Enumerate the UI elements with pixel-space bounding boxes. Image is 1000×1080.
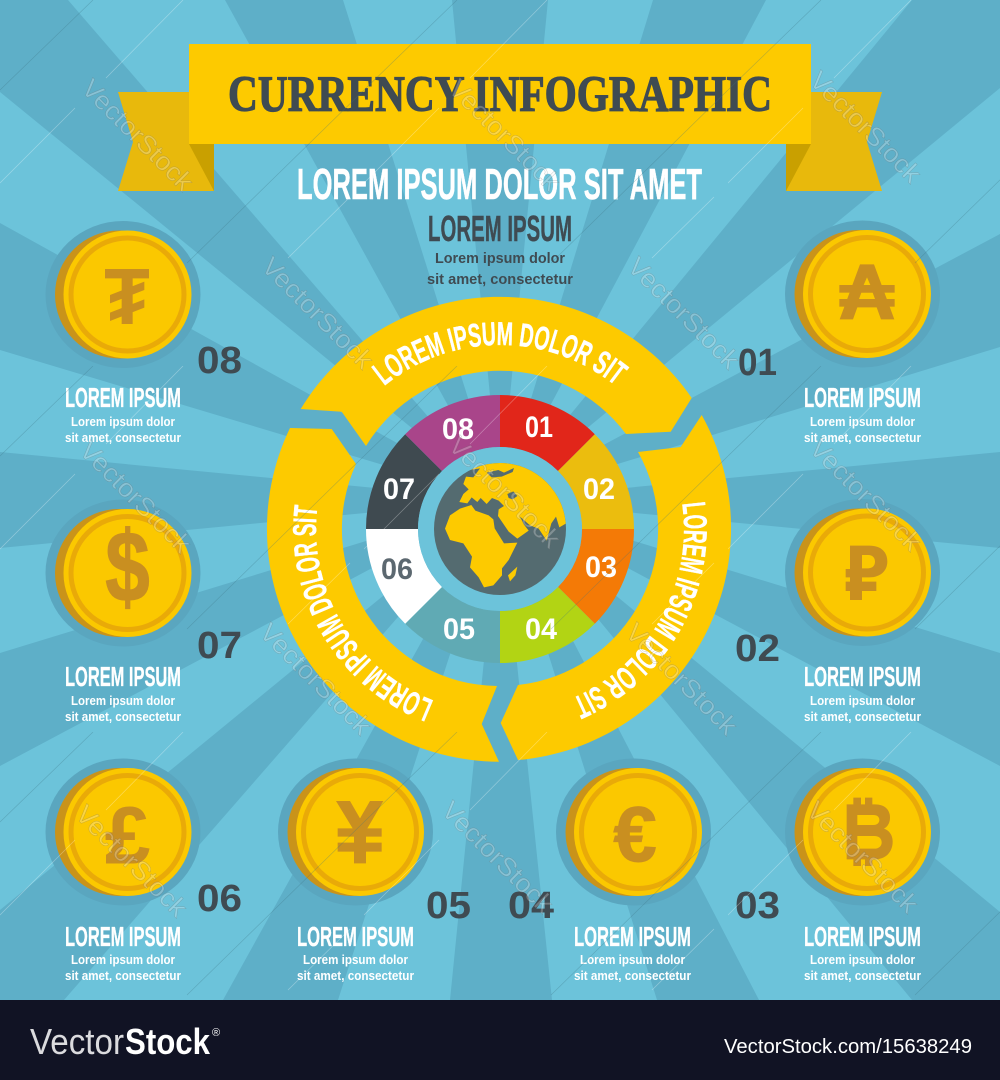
footer id: VectorStock.com/15638249 (724, 1036, 972, 1058)
text block 01: sit amet, consectetur (804, 430, 921, 445)
text block 06 (65, 921, 181, 983)
text block 05: LOREM IPSUM (297, 921, 414, 952)
item 08: tugrik coin (46, 221, 200, 368)
text block 03 (804, 921, 921, 983)
Eurasia landmass (459, 463, 566, 540)
text block 08: LOREM IPSUM (65, 382, 181, 413)
text block 07: sit amet, consectetur (65, 709, 181, 724)
item 07: dollar coin (46, 500, 200, 646)
text block 05: Lorem ipsum dolor (303, 952, 408, 967)
arrow label: right: LOREM IPSUM DOLOR SIT (576, 502, 708, 720)
text block 01: LOREM IPSUM (804, 382, 921, 413)
arrow segment: right (501, 415, 731, 760)
watermark overlay: VectorStock (443, 73, 567, 198)
item 06: pound coin (46, 758, 200, 906)
segment 06 (366, 529, 442, 624)
text block 04 (574, 921, 691, 983)
watermark overlay: VectorStock (622, 251, 746, 376)
segment 07 (366, 434, 442, 529)
text block 03: sit amet, consectetur (804, 968, 921, 983)
icon: dollar symbol: $ (105, 512, 150, 623)
footer bar (0, 1000, 1000, 1080)
segment 08 (405, 395, 500, 471)
arrow segment: top (301, 297, 692, 446)
text block 08: Lorem ipsum dolor (71, 414, 175, 429)
ribbon left fold (189, 144, 214, 191)
icon: tugrik symbol (105, 269, 149, 324)
watermark overlay: VectorStock (76, 73, 200, 198)
segment 01 (500, 395, 595, 471)
title ribbon (118, 44, 882, 191)
text block 01 (804, 382, 921, 445)
watermark overlay: VectorStock (801, 795, 925, 920)
segment numbers: 08 (442, 413, 474, 446)
number 08: 08 (197, 340, 242, 382)
central text block: Lorem ipsum dolor (435, 250, 565, 267)
footer logo (30, 1021, 220, 1062)
icon: yen symbol (336, 801, 383, 863)
ribbon band (189, 44, 811, 144)
segment 05 (405, 587, 500, 663)
arrow label: left: LOREM IPSUM DOLOR SIT (292, 504, 434, 722)
watermark overlay: VectorStock (443, 430, 567, 555)
text block 05 (297, 921, 414, 983)
segment numbers: 01 (525, 411, 553, 444)
ribbon right fold (786, 144, 811, 191)
watermark overlay: VectorStock (70, 799, 194, 924)
watermark overlay: VectorStock (254, 617, 378, 742)
text block 04: LOREM IPSUM (574, 921, 691, 952)
Black Sea and northern seas (487, 468, 517, 499)
segment numbers: 02 (583, 473, 615, 506)
text block 04: sit amet, consectetur (574, 968, 691, 983)
item 02: ruble coin (785, 499, 940, 646)
watermark overlay: VectorStock (620, 617, 744, 742)
text block 04: Lorem ipsum dolor (580, 952, 685, 967)
ribbon left tail (118, 92, 214, 191)
number 05: 05 (426, 885, 471, 927)
title: CURRENCY INFOGRAPHIC (228, 67, 772, 123)
watermark overlay: VectorStock (436, 795, 560, 920)
segment numbers: 04 (525, 613, 557, 646)
segment numbers: 05 (443, 613, 475, 646)
arrow segment: left (267, 428, 499, 762)
icon: ruble symbol (846, 546, 887, 600)
icon: bitcoin symbol (847, 798, 893, 866)
number 01: 01 (738, 342, 777, 384)
central text block: sit amet, consectetur (427, 271, 573, 288)
text block 06: LOREM IPSUM (65, 921, 181, 952)
item 03: bitcoin coin (785, 758, 940, 906)
icon: austral symbol (839, 264, 895, 319)
item 04: euro coin (556, 758, 711, 906)
text block 02: sit amet, consectetur (804, 709, 921, 724)
text block 07 (65, 661, 181, 724)
text block 06: sit amet, consectetur (65, 968, 181, 983)
text block 08 (65, 382, 181, 445)
text block 01: Lorem ipsum dolor (810, 414, 915, 429)
Madagascar (508, 567, 517, 581)
circular arrows ring (266, 296, 732, 762)
segment numbers (381, 411, 617, 646)
segment numbers: 06 (381, 553, 413, 586)
ribbon right tail (786, 92, 882, 191)
segment numbers: 03 (585, 551, 617, 584)
icon: pound symbol: £ (105, 791, 150, 880)
text block 02: Lorem ipsum dolor (810, 693, 915, 708)
item 05: yen coin (278, 758, 433, 906)
number 03: 03 (735, 885, 780, 927)
text block 02: LOREM IPSUM (804, 661, 921, 692)
text block 07: Lorem ipsum dolor (71, 693, 175, 708)
subtitle: LOREM IPSUM DOLOR SIT AMET (297, 160, 702, 209)
footer logo: ® (212, 1027, 220, 1039)
text block 06: Lorem ipsum dolor (71, 952, 175, 967)
text block 07: LOREM IPSUM (65, 661, 181, 692)
segment 03 (558, 529, 634, 624)
number 07: 07 (197, 625, 242, 667)
watermark overlay: VectorStock (256, 251, 380, 376)
text block 03: LOREM IPSUM (804, 921, 921, 952)
watermark overlay: VectorStock (74, 435, 198, 560)
central text block (427, 208, 573, 288)
text block 02 (804, 661, 921, 724)
item 01: austral coin (785, 220, 940, 368)
Africa landmass (445, 505, 517, 587)
watermark overlay: VectorStock (804, 433, 928, 558)
segment 02 (558, 434, 634, 529)
text block 05: sit amet, consectetur (297, 968, 414, 983)
footer logo: Vector (30, 1021, 124, 1062)
number 04: 04 (508, 885, 554, 927)
text block 03: Lorem ipsum dolor (810, 952, 915, 967)
number 02: 02 (735, 628, 780, 670)
numbered donut ring (366, 395, 634, 663)
icon: euro symbol: € (613, 790, 657, 878)
text block 08: sit amet, consectetur (65, 430, 181, 445)
central text block: LOREM IPSUM (428, 208, 572, 249)
watermark overlay: VectorStock (804, 65, 928, 190)
footer logo: Stock (125, 1021, 211, 1062)
globe icon (418, 447, 582, 611)
segment numbers: 07 (383, 473, 415, 506)
arrow label: top: LOREM IPSUM DOLOR SIT (371, 322, 630, 386)
segment 04 (500, 587, 595, 663)
number 06: 06 (197, 878, 242, 920)
